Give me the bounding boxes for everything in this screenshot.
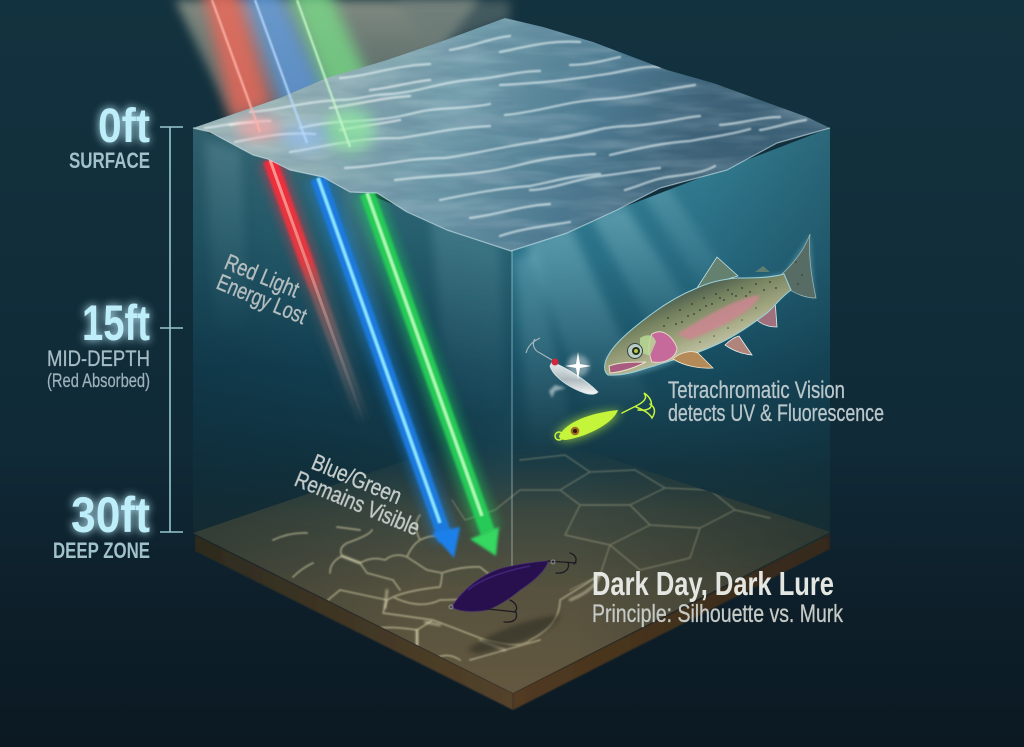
depth label 30ft: 30ft <box>71 487 150 543</box>
depth label 15ft: 15ft <box>82 295 150 351</box>
green light beam with arrow <box>367 193 499 556</box>
label: blue/green remains visible <box>291 449 424 541</box>
water volume <box>193 127 830 690</box>
surface ripple highlights <box>205 36 806 236</box>
gill cover <box>649 332 677 362</box>
tail <box>782 234 816 298</box>
scale line with ticks <box>160 127 183 532</box>
depth label 30ft <box>53 487 150 563</box>
dorsal fin <box>697 257 738 288</box>
depth label 15ft: MID-DEPTH <box>47 346 150 371</box>
brighter caustic highlights <box>342 556 600 650</box>
underwater light shafts <box>512 188 715 418</box>
depth label 0ft: SURFACE <box>69 148 150 173</box>
fish glow <box>606 235 815 375</box>
water surface <box>190 16 835 254</box>
pink lateral stripe <box>677 295 760 340</box>
red light beam, fading out with depth <box>270 160 365 425</box>
trout <box>605 234 816 375</box>
lure shadow <box>467 615 560 654</box>
pale light cone above the surface <box>175 0 510 125</box>
callout: dark day, dark lure <box>592 565 843 628</box>
callout: dark day, dark lure: Principle: Silhouette vs. Murk <box>592 600 843 628</box>
spots <box>663 261 803 343</box>
depth label 15ft <box>47 295 150 392</box>
front vertical edge of the water cube <box>511 250 513 592</box>
depth scale <box>47 100 183 563</box>
mouth <box>609 362 646 373</box>
slab left side <box>195 535 513 710</box>
caustic light network, rear of floor <box>452 455 770 590</box>
adipose fin <box>755 266 770 272</box>
callout: tetrachromatic vision <box>668 377 884 427</box>
callout: tetrachromatic vision: Tetrachromatic Vision <box>668 377 845 404</box>
slab right side <box>513 534 830 710</box>
right water face <box>512 128 830 690</box>
depth label 30ft: DEEP ZONE <box>53 538 150 563</box>
bright ripples near the entry points of the rays <box>230 80 430 130</box>
depth label 0ft <box>69 100 150 173</box>
depth label 0ft: 0ft <box>98 100 150 153</box>
blue light beam with arrow <box>318 178 460 558</box>
green arrowhead <box>470 527 499 556</box>
floor top <box>193 425 830 693</box>
colour ray cores entering the water <box>212 0 350 147</box>
callout: dark day, dark lure: Dark Day, Dark Lure <box>592 565 834 602</box>
left water face <box>193 127 512 690</box>
blue arrowhead <box>432 527 460 558</box>
label: blue/green remains visible: Remains Visible <box>291 466 424 541</box>
coloured glows above the surface <box>200 0 372 120</box>
label: red light energy lost <box>213 249 311 329</box>
eye <box>628 344 642 358</box>
pectoral fin <box>673 352 713 368</box>
colour glints seen through the surface <box>236 108 374 152</box>
callout: tetrachromatic vision: detects UV & Fluorescence <box>668 400 884 427</box>
label: red light energy lost: Energy Lost <box>213 269 311 329</box>
label: red light energy lost: Red Light <box>221 249 304 303</box>
depth label 15ft: (Red Absorbed) <box>47 371 150 392</box>
dark purple lure <box>449 553 576 654</box>
fluorescent green lure <box>555 393 654 441</box>
ventral fin <box>725 336 752 355</box>
sea floor slab <box>193 425 830 710</box>
silver spoon lure <box>526 338 598 398</box>
fish body <box>605 274 791 375</box>
anal fin <box>757 300 777 327</box>
label: blue/green remains visible: Blue/Green <box>308 449 406 509</box>
sparkle <box>549 352 591 398</box>
caustic light network, front of floor <box>273 515 600 662</box>
